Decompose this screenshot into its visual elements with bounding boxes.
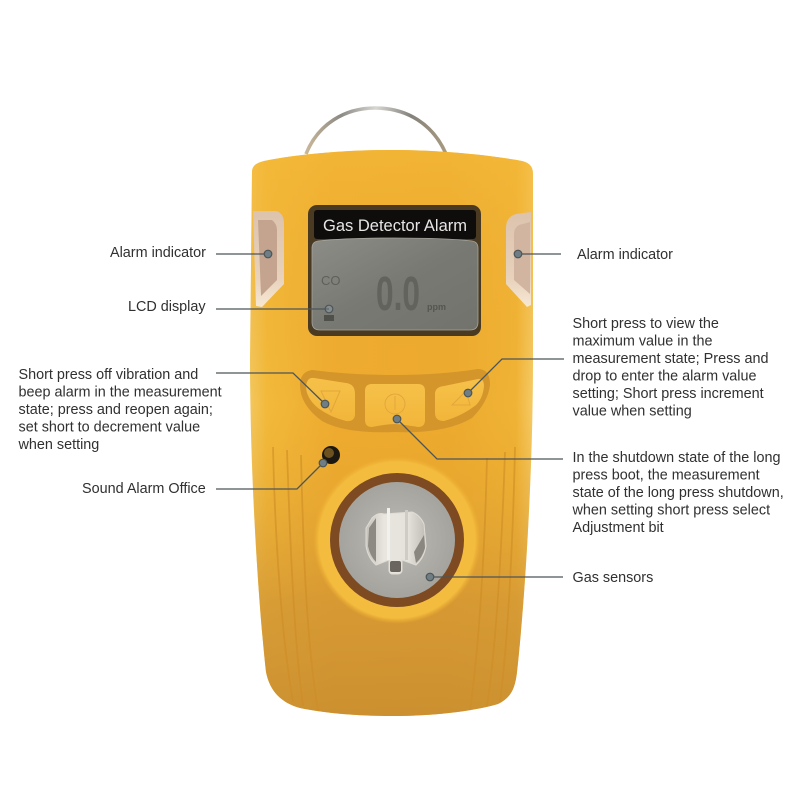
callout: increment button: measurement state; Press and <box>572 351 768 367</box>
callout: decrement button: when setting <box>18 437 99 453</box>
callout: power button: when setting short press select <box>572 502 770 518</box>
side grooves <box>273 447 515 710</box>
callout: increment button: Short press to view the <box>572 316 719 332</box>
callout: increment button: value when setting <box>572 404 692 420</box>
gas sensor <box>313 456 481 624</box>
LCD display: ppm <box>427 302 446 312</box>
callout: gas sensors: Gas sensors <box>572 570 653 586</box>
callout: LCD display <box>128 299 333 315</box>
banner <box>314 210 476 239</box>
LCD display: 0.0 <box>376 266 420 321</box>
callout: increment button: drop to enter the alarm value <box>572 368 756 384</box>
button: power <box>365 384 425 427</box>
callout: alarm indicator right: Alarm indicator <box>577 247 673 263</box>
callout: alarm indicator right <box>514 247 673 263</box>
callout: power button: press boot, the measurement <box>572 468 760 484</box>
button: increment <box>435 379 484 421</box>
callout: increment button: maximum value in the <box>572 334 712 350</box>
body <box>250 150 533 716</box>
callout: decrement button: beep alarm in the measurement <box>18 384 222 400</box>
callout: power button: Adjustment bit <box>572 520 664 536</box>
LCD display: CO <box>321 273 340 288</box>
callout: increment button: setting; Short press increment <box>572 386 764 402</box>
LCD display <box>308 205 481 336</box>
callout: power button <box>393 415 784 536</box>
metal ring <box>306 108 446 154</box>
sensor vents <box>366 512 426 574</box>
callout: LCD display: LCD display <box>128 299 206 315</box>
callout: decrement button: set short to decrement value <box>18 420 200 436</box>
callout: decrement button: Short press off vibration and <box>18 367 198 383</box>
button recess <box>300 369 490 432</box>
callout: decrement button: state; press and reopen again; <box>18 402 213 418</box>
callout: decrement button <box>18 367 329 453</box>
sound alarm hole <box>322 446 340 464</box>
button: decrement <box>306 378 355 421</box>
callout: sound alarm office <box>82 459 327 497</box>
right alarm indicator <box>506 212 531 307</box>
left alarm indicator <box>253 211 284 307</box>
callout: increment button <box>464 316 768 420</box>
LCD display: Gas Detector Alarm <box>323 217 467 235</box>
callout: power button: In the shutdown state of the long <box>572 450 781 466</box>
callout: alarm indicator left <box>110 245 272 261</box>
callout: power button: state of the long press shutdown, <box>572 485 784 501</box>
device: gas detector <box>250 108 533 716</box>
callout: gas sensors <box>426 570 653 586</box>
callout: alarm indicator left: Alarm indicator <box>110 245 206 261</box>
screen <box>312 238 478 330</box>
callout: sound alarm office: Sound Alarm Office <box>82 481 206 497</box>
